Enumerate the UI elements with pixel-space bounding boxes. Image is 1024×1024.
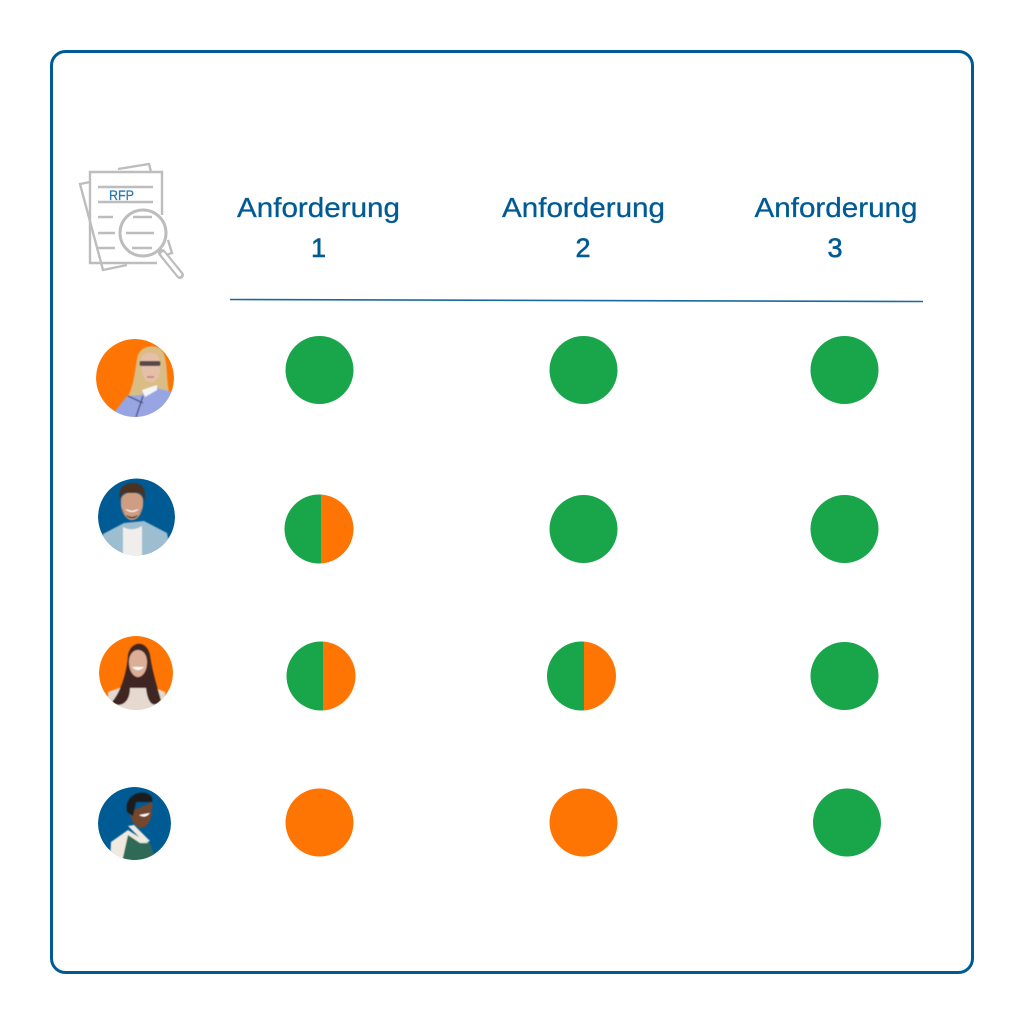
row 1 ratings xyxy=(286,336,878,404)
portrait: man in green vest xyxy=(98,787,171,862)
row 4 ratings xyxy=(286,788,881,856)
heading: Anforderung 2: 2 xyxy=(575,233,591,263)
heading: Anforderung 1: 1 xyxy=(311,233,326,263)
portrait: blonde woman with glasses xyxy=(96,339,176,422)
row 3 ratings xyxy=(286,642,878,710)
heading: Anforderung 3 xyxy=(754,192,918,263)
heading: Anforderung 2: Anforderung xyxy=(502,192,665,223)
heading: Anforderung 3: 3 xyxy=(827,233,843,263)
row 2 ratings xyxy=(284,494,878,564)
heading: Anforderung 2 xyxy=(502,192,665,263)
heading: Anforderung 3: Anforderung xyxy=(754,192,918,223)
header divider xyxy=(230,300,923,302)
icon: RFP document with magnifier xyxy=(80,164,180,275)
heading: Anforderung 1 xyxy=(237,192,400,263)
portrait: smiling woman with long dark hair xyxy=(99,636,173,715)
portrait: bearded man in denim shirt xyxy=(98,478,175,560)
icon: RFP document with magnifier: RFP xyxy=(109,187,134,203)
heading: Anforderung 1: Anforderung xyxy=(237,192,400,223)
